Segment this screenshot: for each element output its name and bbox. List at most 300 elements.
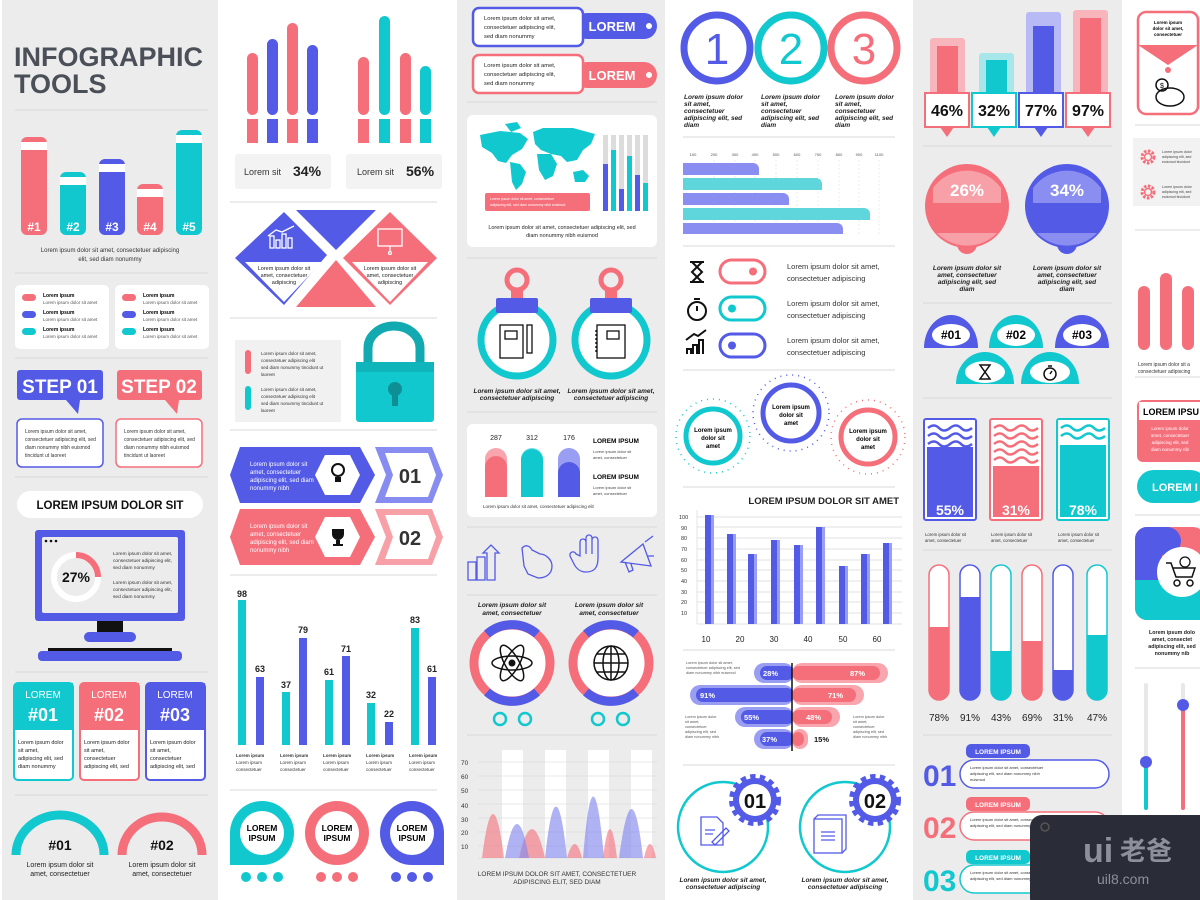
numbered cards: Lorem ipsum dolor — [84, 740, 130, 746]
step callouts: STEP 01 — [22, 377, 98, 398]
test tube gauges: 47% — [1087, 713, 1107, 724]
dotted rings: amet — [861, 445, 875, 451]
area chart: 70 — [461, 760, 469, 767]
pill chart card: Lorem ipsum dolor sit — [593, 485, 632, 490]
legend panel — [235, 340, 341, 422]
paired bar chart: Lorem ipsum — [280, 760, 306, 765]
toggle rows with icons: Lorem ipsum dolor sit amet, — [787, 262, 880, 271]
location pins: IPSUM — [324, 833, 350, 843]
toggle cards: Lorem ipsum — [143, 310, 175, 316]
lorem ipsum card — [1137, 400, 1200, 503]
area chart: 60 — [461, 774, 469, 781]
horizontal bar chart: 800 — [836, 152, 843, 157]
dotted rings: amet — [706, 444, 720, 450]
title: INFOGRAPHIC — [14, 42, 203, 72]
test tube gauges: 91% — [960, 713, 980, 724]
diamond diagram — [235, 210, 437, 307]
location pins: LOREM — [322, 823, 352, 833]
toggle cards: Lorem ipsum dolor sit amet — [43, 334, 98, 339]
balloon percentages: 26% — [950, 181, 984, 200]
paired bar chart: Lorem ipsum — [323, 753, 351, 758]
balloon percentages: Lorem ipsum dolor sit — [1033, 265, 1102, 272]
diamond diagram: amet, consectetuer — [367, 273, 414, 279]
test tube gauges: 78% — [929, 713, 949, 724]
test tube gauges: 43% — [991, 713, 1011, 724]
monitor with donut: sed diam nonummy — [113, 565, 155, 571]
horizontal bar chart: 100 — [690, 152, 697, 157]
step callouts: Lorem ipsum dolor sit amet, — [124, 429, 186, 435]
watermark: 老爸 — [1120, 831, 1172, 868]
world map card: adipiscing elit, sed diam nonummy nibh euismod — [490, 203, 565, 207]
half-circle labels: #01 — [48, 837, 72, 853]
cylinder bar chart: #1 — [27, 220, 41, 234]
diamond diagram: adipiscing — [378, 280, 402, 286]
vertical bar chart: 40 — [681, 579, 687, 585]
vertical bar chart: 50 — [839, 635, 848, 644]
butterfly chart: 55% — [744, 713, 759, 722]
donut icons — [474, 602, 649, 725]
toggle cards: Lorem ipsum dolor sit amet — [43, 300, 98, 305]
monitor with donut: consectetuer adipiscing elit, — [113, 587, 172, 593]
vertical bar chart — [679, 496, 902, 644]
paired bar chart: 83 — [410, 615, 420, 625]
pink bars partial — [1138, 273, 1194, 375]
paired bar chart: 71 — [341, 644, 351, 654]
butterfly chart: consectetuer — [685, 725, 707, 729]
toggle cards: Lorem ipsum dolor sit amet — [43, 317, 98, 322]
donut icons: Lorem ipsum dolor sit — [575, 602, 644, 609]
test tube gauges: 69% — [1022, 713, 1042, 724]
butterfly chart: Lorem ipsum dolor sit amet, — [686, 661, 733, 665]
wave boxes: Lorem ipsum dolor sit — [1058, 532, 1100, 537]
numbered circles 1 2 3: diam — [835, 122, 850, 129]
numbered circles 1 2 3 — [684, 15, 897, 129]
gear list panel: adipiscing elit, sed — [1162, 155, 1191, 159]
diamond diagram: Lorem ipsum dolor sit — [258, 266, 311, 272]
horizontal bar chart: 900 — [856, 152, 863, 157]
dotted rings: Lorem ipsum — [849, 429, 887, 435]
butterfly chart: Lorem ipsum dolor — [685, 715, 717, 719]
toggle rows with icons: consectetuer adipiscing — [787, 311, 865, 320]
world map card — [467, 115, 657, 247]
toggle cards: Lorem ipsum — [43, 327, 75, 333]
numbered cards: adipiscing elit, sed — [150, 764, 195, 770]
paired bar chart — [236, 589, 437, 772]
wave boxes: amet, consectetuer — [991, 538, 1028, 543]
gear list panel: Lorem ipsum dolor — [1162, 185, 1193, 189]
gear circles: Lorem ipsum dolor sit amet, — [679, 877, 767, 884]
gear list panel: Lorem ipsum dolor — [1162, 150, 1193, 154]
half-circle labels: #02 — [150, 837, 174, 853]
butterfly chart: consectetuer adipiscing elit, sed — [686, 666, 740, 670]
outline icons — [468, 535, 654, 580]
watermark: uil8.com — [1097, 871, 1149, 887]
vertical bar chart: 20 — [736, 635, 745, 644]
clip badges: Lorem ipsum dolor sit amet, — [567, 388, 655, 395]
cart card: nonummy nib — [1155, 651, 1190, 657]
numbered list rows: 03 — [923, 865, 956, 898]
cart card — [1135, 527, 1200, 657]
legend panel: Lorem ipsum dolor sit amet, — [261, 351, 317, 356]
pill chart card: amet, consectetuer — [593, 491, 628, 496]
hexagon arrow rows: Lorem ipsum dolor sit — [250, 524, 308, 530]
numbered cards: LOREM — [157, 690, 193, 701]
step callouts: diam nonummy nibh euismod — [25, 445, 91, 451]
dotted rings: Lorem ipsum — [772, 405, 810, 411]
hash domes: #01 — [941, 328, 961, 342]
balloon percentages: adipiscing elit, sed — [938, 279, 997, 286]
vertical bar chart: 50 — [681, 568, 687, 574]
tag labels: Lorem ipsum dolor sit amet, — [484, 63, 556, 69]
step callouts: tincidunt ut laoreet — [25, 453, 66, 459]
vertical bar chart: 20 — [681, 600, 687, 606]
pill chart card: LOREM IPSUM — [593, 474, 639, 481]
pill chart card: Lorem ipsum dolor sit amet, consectetuer adipiscing elit — [483, 504, 595, 509]
gear circles: consectetuer adipiscing — [808, 884, 882, 891]
numbered circles 1 2 3: 1 — [705, 25, 729, 74]
butterfly chart: 48% — [806, 713, 821, 722]
numbered circles 1 2 3: adipiscing elit, sed — [684, 115, 743, 122]
vertical bar chart: 100 — [679, 515, 688, 521]
tag labels: sed diam nonummy — [484, 81, 535, 87]
vertical bar chart: 70 — [681, 547, 687, 553]
world map card: diam nonummy nibh euismod — [526, 233, 598, 239]
location pins: LOREM — [397, 823, 427, 833]
horizontal bar chart: 700 — [815, 152, 822, 157]
paired bar chart: 79 — [298, 625, 308, 635]
cart card: Lorem ipsum dolo — [1149, 630, 1196, 636]
clip badges — [473, 270, 655, 402]
legend panel: consectetuer adipiscing elit — [261, 358, 316, 363]
numbered circles 1 2 3: sit amet, — [835, 101, 862, 108]
half-circle labels: amet, consectetuer — [30, 871, 90, 878]
wave boxes: amet, consectetuer — [1058, 538, 1095, 543]
tag labels: sed diam nonummy — [484, 34, 535, 40]
monitor with donut: 27% — [62, 569, 91, 585]
numbered circles 1 2 3: Lorem ipsum dolor — [761, 94, 820, 101]
dotted rings: Lorem ipsum — [694, 428, 732, 434]
test tube gauges — [929, 565, 1107, 724]
percentage callout bars: 97% — [1072, 103, 1104, 120]
numbered circles 1 2 3: sit amet, — [761, 101, 788, 108]
area chart — [461, 750, 657, 886]
piggy bank card — [1138, 12, 1198, 114]
cylinder bar chart: #3 — [105, 220, 119, 234]
numbered circles 1 2 3: consectetuer — [684, 108, 725, 115]
gear circles: 02 — [864, 791, 886, 813]
paired bar chart: 37 — [281, 680, 291, 690]
dotted rings: dolor sit — [779, 413, 803, 419]
numbered cards: Lorem ipsum dolor — [150, 740, 196, 746]
donut icons: amet, consectetuer — [482, 610, 542, 617]
gear list panel: euismod tincidunt — [1162, 195, 1190, 199]
legend panel: consectetuer adipiscing elit — [261, 394, 316, 399]
legend panel: laoreet — [261, 408, 276, 413]
pill chart card: Lorem ipsum dolor sit — [593, 449, 632, 454]
piggy bank card: dolor sit amet, — [1153, 26, 1183, 31]
paired bar chart: consectetuer — [323, 767, 349, 772]
numbered cards: #01 — [28, 705, 58, 725]
wave boxes: Lorem ipsum dolor sit — [991, 532, 1033, 537]
toggle cards — [15, 285, 209, 349]
watermark — [1030, 815, 1200, 900]
numbered list rows: Lorem ipsum dolor sit amet, consectetuer — [970, 817, 1044, 822]
numbered cards: adipiscing elit, sed — [18, 756, 63, 762]
paired bar chart: 22 — [384, 709, 394, 719]
numbered circles 1 2 3: 3 — [852, 25, 876, 74]
tag labels — [473, 8, 657, 93]
numbered circles 1 2 3: consectetuer — [835, 108, 876, 115]
percentage callout bars: 77% — [1025, 103, 1057, 120]
pill chart card: amet, consectetuer — [593, 455, 628, 460]
cart card: adipiscing elit, sed — [1148, 644, 1196, 650]
column bar charts (col2) — [247, 16, 431, 143]
numbered cards: sit amet, — [150, 748, 171, 754]
butterfly chart: diam nonummy nibh — [685, 735, 719, 739]
numbered cards: #03 — [160, 705, 190, 725]
horizontal bar chart: 400 — [752, 152, 759, 157]
numbered list rows: Lorem ipsum dolor sit amet, consectetuer — [970, 765, 1044, 770]
percentage callout bars: 32% — [978, 103, 1010, 120]
numbered circles 1 2 3: Lorem ipsum dolor — [835, 94, 894, 101]
toggle rows with icons — [686, 260, 880, 357]
butterfly chart: adipiscing elit, sed — [853, 730, 884, 734]
wave boxes — [924, 419, 1109, 543]
monitor with donut: sed diam nonummy — [113, 594, 155, 600]
numbered cards: LOREM — [91, 690, 127, 701]
hexagon arrow rows: adipiscing elit, sed diam — [250, 540, 314, 546]
butterfly chart: consectetuer — [853, 725, 875, 729]
numbered circles 1 2 3: consectetuer — [761, 108, 802, 115]
paired bar chart: Lorem ipsum — [236, 760, 262, 765]
numbered list rows: LOREM IPSUM — [975, 802, 1021, 809]
paired bar chart: consectetuer — [409, 767, 435, 772]
icon: padlock — [356, 326, 434, 422]
gear circles: 01 — [744, 791, 766, 813]
vertical bar chart: 30 — [770, 635, 779, 644]
toggle rows with icons: Lorem ipsum dolor sit amet, — [787, 299, 880, 308]
piggy bank card: consectetuer — [1154, 32, 1182, 37]
area chart: 20 — [461, 830, 469, 837]
pink bars partial: consectetuer adipiscing — [1138, 369, 1190, 375]
hexagon arrow rows: amet, consectetuer — [250, 532, 301, 538]
vertical bar chart: 30 — [681, 590, 687, 596]
sliders — [1140, 683, 1189, 810]
cylinder bar chart — [21, 130, 202, 235]
numbered list rows: adipiscing elit, sed diam nonummy nibh — [970, 823, 1040, 828]
balloon percentages: adipiscing elit, sed — [1038, 279, 1097, 286]
numbered circles 1 2 3: adipiscing elit, sed — [835, 115, 894, 122]
chart caption: Lorem ipsum dolor sit amet, consectetuer adipiscing — [41, 248, 179, 254]
butterfly chart: 28% — [763, 669, 778, 678]
location pins: IPSUM — [249, 833, 275, 843]
tag labels: consectetuer adipiscing elit, — [484, 25, 556, 31]
dotted rings: amet — [784, 421, 798, 427]
balloon percentages: amet, consectetuer — [937, 272, 997, 279]
test tube gauges: 31% — [1053, 713, 1073, 724]
wave boxes: 31% — [1002, 502, 1031, 518]
lorem ipsum card: Lorem ipsum dolor — [1151, 426, 1189, 431]
paired bar chart: 61 — [324, 667, 334, 677]
wave boxes: 78% — [1069, 502, 1098, 518]
stat boxes: Lorem sit — [357, 167, 395, 177]
horizontal bar chart: 500 — [773, 152, 780, 157]
butterfly chart: 71% — [828, 691, 843, 700]
watermark: ui — [1083, 832, 1113, 870]
numbered cards: consectetuer — [84, 756, 116, 762]
diamond diagram: amet, consectetuer — [261, 273, 308, 279]
cart card: amet, consectet — [1152, 637, 1192, 643]
paired bar chart: 98 — [237, 589, 247, 599]
step callouts: diam nonummy nibh euismod — [124, 445, 190, 451]
wave boxes: 55% — [936, 502, 965, 518]
butterfly chart: diam nonummy nibh euismod — [686, 671, 736, 675]
pill chart card: 287 — [490, 435, 502, 442]
numbered list rows: Lorem ipsum dolor sit amet, consectetuer — [970, 870, 1044, 875]
tag labels: Lorem ipsum dolor sit amet, — [484, 16, 556, 22]
location pins — [230, 801, 444, 882]
clip badges: consectetuer adipiscing — [480, 395, 554, 402]
lorem ipsum card: LOREM IPSU — [1143, 407, 1199, 417]
balloon percentages: diam — [959, 286, 975, 293]
step callouts: STEP 02 — [121, 377, 197, 398]
numbered list rows — [923, 744, 1109, 898]
toggle cards: Lorem ipsum dolor sit amet — [143, 334, 198, 339]
butterfly chart — [685, 661, 888, 751]
vertical bar chart: 10 — [681, 611, 687, 617]
piggy bank card: Lorem ipsum — [1154, 20, 1182, 25]
pill chart card: LOREM IPSUM — [593, 438, 639, 445]
numbered cards — [14, 683, 205, 780]
paired bar chart: consectetuer — [280, 767, 306, 772]
legend panel: sed diam nonummy tincidunt ut — [261, 401, 324, 406]
gear list panel — [1133, 138, 1200, 206]
wave boxes: amet, consectetuer — [925, 538, 962, 543]
piggy bank card: $ — [1160, 83, 1164, 90]
clip badges: Lorem ipsum dolor sit amet, — [473, 388, 561, 395]
pink bars partial: Lorem ipsum dolor sit a — [1138, 362, 1190, 368]
dotted rings: dolor sit — [856, 437, 880, 443]
horizontal bar chart: 300 — [732, 152, 739, 157]
step callouts — [17, 370, 202, 467]
title: TOOLS — [14, 69, 107, 99]
hexagon arrow rows: amet, consectetuer — [250, 470, 301, 476]
paired bar chart: Lorem ipsum — [280, 753, 308, 758]
half-circle labels: amet, consectetuer — [132, 871, 192, 878]
step callouts: tincidunt ut laoreet — [124, 453, 165, 459]
lorem ipsum card: diam nonummy nib — [1151, 447, 1189, 452]
paired bar chart: 63 — [255, 664, 265, 674]
tag labels: LOREM — [589, 19, 635, 34]
pill chart card: 312 — [526, 435, 538, 442]
title — [14, 42, 203, 99]
heading pill: LOREM IPSUM DOLOR SIT — [37, 500, 183, 512]
area chart: 30 — [461, 817, 469, 824]
hexagon arrow rows: nonummy nibh — [250, 548, 289, 554]
numbered cards: sit amet, — [84, 748, 105, 754]
hash domes: #02 — [1006, 328, 1026, 342]
paired bar chart: 61 — [427, 664, 437, 674]
hexagon arrow rows — [230, 447, 443, 565]
hexagon arrow rows: 01 — [399, 466, 421, 488]
area chart: LOREM IPSUM DOLOR SIT AMET, CONSECTETUER — [478, 871, 637, 878]
diamond diagram: Lorem ipsum dolor sit — [364, 266, 417, 272]
toggle rows with icons: Lorem ipsum dolor sit amet, — [787, 336, 880, 345]
butterfly chart: sit amet, — [685, 720, 699, 724]
paired bar chart: 32 — [366, 690, 376, 700]
half-circle labels: Lorem ipsum dolor sit — [129, 862, 196, 869]
area chart: 50 — [461, 788, 469, 795]
vertical bar chart: 40 — [804, 635, 813, 644]
area chart: 10 — [461, 844, 469, 851]
gear list panel: euismod tincidunt — [1162, 160, 1190, 164]
lorem ipsum card: amet, consectetuer — [1151, 433, 1190, 438]
butterfly chart: Lorem ipsum dolor — [853, 715, 885, 719]
paired bar chart: Lorem ipsum — [366, 760, 392, 765]
heading pill — [17, 491, 203, 518]
donut icons: amet, consectetuer — [579, 610, 639, 617]
numbered circles 1 2 3: sit amet, — [684, 101, 711, 108]
chart caption — [41, 248, 179, 263]
step callouts: consectetuer adipiscing elit, sed — [124, 437, 195, 443]
paired bar chart: Lorem ipsum — [323, 760, 349, 765]
hash domes: #03 — [1072, 328, 1092, 342]
horizontal bar chart: 600 — [794, 152, 801, 157]
monitor with donut: consectetuer adipiscing elit, — [113, 558, 172, 564]
step callouts: Lorem ipsum dolor sit amet, — [25, 429, 87, 435]
numbered cards: consectetuer — [150, 756, 182, 762]
stat boxes: 34% — [293, 163, 322, 179]
legend panel: sed diam nonummy tincidunt ut — [261, 365, 324, 370]
vertical bar chart: 90 — [681, 526, 687, 532]
percentage callout bars: 46% — [931, 103, 963, 120]
toggle rows with icons: consectetuer adipiscing — [787, 274, 865, 283]
butterfly chart: adipiscing elit, sed — [685, 730, 716, 734]
gear circles: Lorem ipsum dolor sit amet, — [801, 877, 889, 884]
vertical bar chart: 60 — [681, 558, 687, 564]
butterfly chart: 37% — [762, 735, 777, 744]
hash domes — [924, 315, 1109, 384]
location pins: LOREM — [247, 823, 277, 833]
tag labels: consectetuer adipiscing elit, — [484, 72, 556, 78]
numbered list rows: LOREM IPSUM — [975, 855, 1021, 862]
horizontal bar chart — [683, 152, 884, 236]
horizontal bar chart: 1100 — [875, 152, 884, 157]
butterfly chart: 15% — [814, 735, 829, 744]
legend panel: laoreet — [261, 372, 276, 377]
dotted rings: dolor sit — [701, 436, 725, 442]
pill chart card: 176 — [563, 435, 575, 442]
hexagon arrow rows: nonummy nibh — [250, 486, 289, 492]
vertical bar chart: LOREM IPSUM DOLOR SIT AMET — [748, 496, 899, 507]
monitor with donut: Lorem ipsum dolor sit amet, — [113, 551, 172, 557]
balloon percentages: amet, consectetuer — [1037, 272, 1097, 279]
numbered cards: diam nonummy — [18, 764, 56, 770]
numbered list rows: adipiscing elit, sed diam nonummy nibh — [970, 876, 1040, 881]
paired bar chart: Lorem ipsum — [409, 753, 437, 758]
hexagon arrow rows: Lorem ipsum dolor sit — [250, 462, 308, 468]
world map card: Lorem ipsum dolor sit amet, consectetuer adipiscing elit, sed — [488, 225, 636, 231]
pill chart card — [467, 424, 657, 517]
numbered list rows: adipiscing elit, sed diam nonummy nibh — [970, 771, 1040, 776]
paired bar chart: consectetuer — [236, 767, 262, 772]
gear list panel: adipiscing elit, sed — [1162, 190, 1191, 194]
hexagon arrow rows: 02 — [399, 528, 421, 550]
numbered circles 1 2 3: adipiscing elit, sed — [761, 115, 820, 122]
paired bar chart: Lorem ipsum — [236, 753, 264, 758]
paired bar chart: Lorem ipsum — [366, 753, 394, 758]
percentage callout bars — [925, 10, 1110, 137]
